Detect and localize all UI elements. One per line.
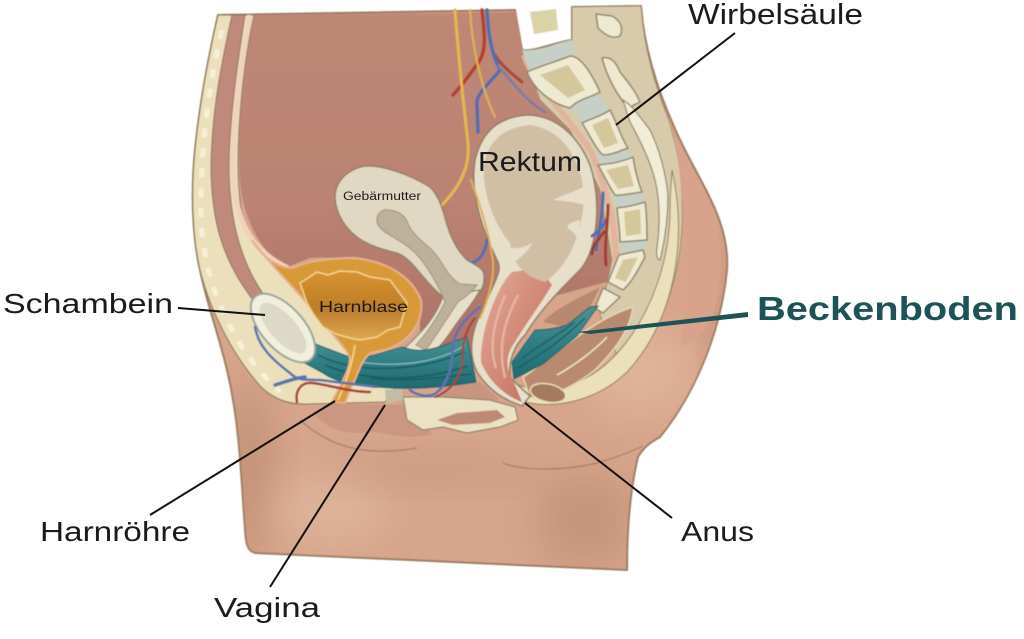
rectum outer wall [472,115,597,406]
leader line: Anus [525,403,672,518]
skin shading [228,230,728,570]
pelvic vessels upper [440,10,608,318]
back fat layer [518,170,678,404]
sacral vertebra 3 [595,288,620,313]
discs [522,40,647,256]
vagina upper tube [405,290,480,358]
gluteal muscles [523,307,633,398]
sacral vertebra 2 [608,250,645,290]
leader line: Vagina [270,405,385,587]
anal canal [481,268,552,402]
label: Schambein: Schambein [3,288,173,319]
label: Harnblase: Harnblase [319,299,408,316]
body silhouette [193,6,727,570]
lumbar vertebra 2 [582,110,628,155]
label: Gebärmutter: Gebärmutter [343,191,421,203]
uterine cavity [377,210,477,350]
abdominal fat layer [193,15,395,404]
sacral vertebra 1 [617,202,647,242]
lumbar vertebra 1 [527,56,600,108]
label: Rektum: Rektum [478,146,582,177]
label: Beckenboden: Beckenboden [757,290,1018,327]
vaginal opening [385,388,403,404]
peritoneum left edge [233,15,288,268]
vertebrae [527,9,647,313]
pelvic cavity tissue [440,382,500,400]
fascia line [557,337,607,375]
pubic bone [239,283,327,373]
top spinous processes [596,14,640,108]
labia [313,404,432,437]
spine back column [522,6,682,370]
leader line: Beckenboden [578,312,748,334]
fat texture [201,30,280,392]
spinal canal [623,100,668,260]
label: Harnröhre: Harnröhre [40,516,190,547]
pelvic floor right band [512,306,598,379]
uterus [335,166,484,297]
leader line: Harnröhre [150,401,335,515]
top vertebra fragment [530,9,558,34]
label: Vagina: Vagina [214,592,321,623]
anal canal folds [493,295,518,378]
anatomical illustration [193,6,728,570]
label: Anus: Anus [681,516,754,547]
vagina lower front [403,397,518,433]
skin crease: pubic [300,420,417,451]
abdominal cavity [239,12,614,355]
perineal body [437,410,505,425]
leader line: Schambein [178,308,265,315]
urethra lumen [338,345,355,400]
lower back skin strip [668,118,721,345]
rectum lumen [484,125,584,282]
bladder lumen [300,271,407,340]
lumbar vertebra 3 [598,157,642,195]
peritoneum edge [524,55,618,272]
bladder wall and urethra [252,240,421,403]
skin crease: gluteal [503,446,643,469]
muscle above pelvic floor [543,287,600,327]
pelvic floor left band [303,337,476,388]
abdominal muscle [211,15,266,305]
anal sphincter muscle [529,380,567,406]
bone texture [540,65,641,282]
leader line: Wirbelsäule [616,33,735,125]
rectal fold spurs [510,186,585,262]
lower pelvic vessels [255,307,480,402]
